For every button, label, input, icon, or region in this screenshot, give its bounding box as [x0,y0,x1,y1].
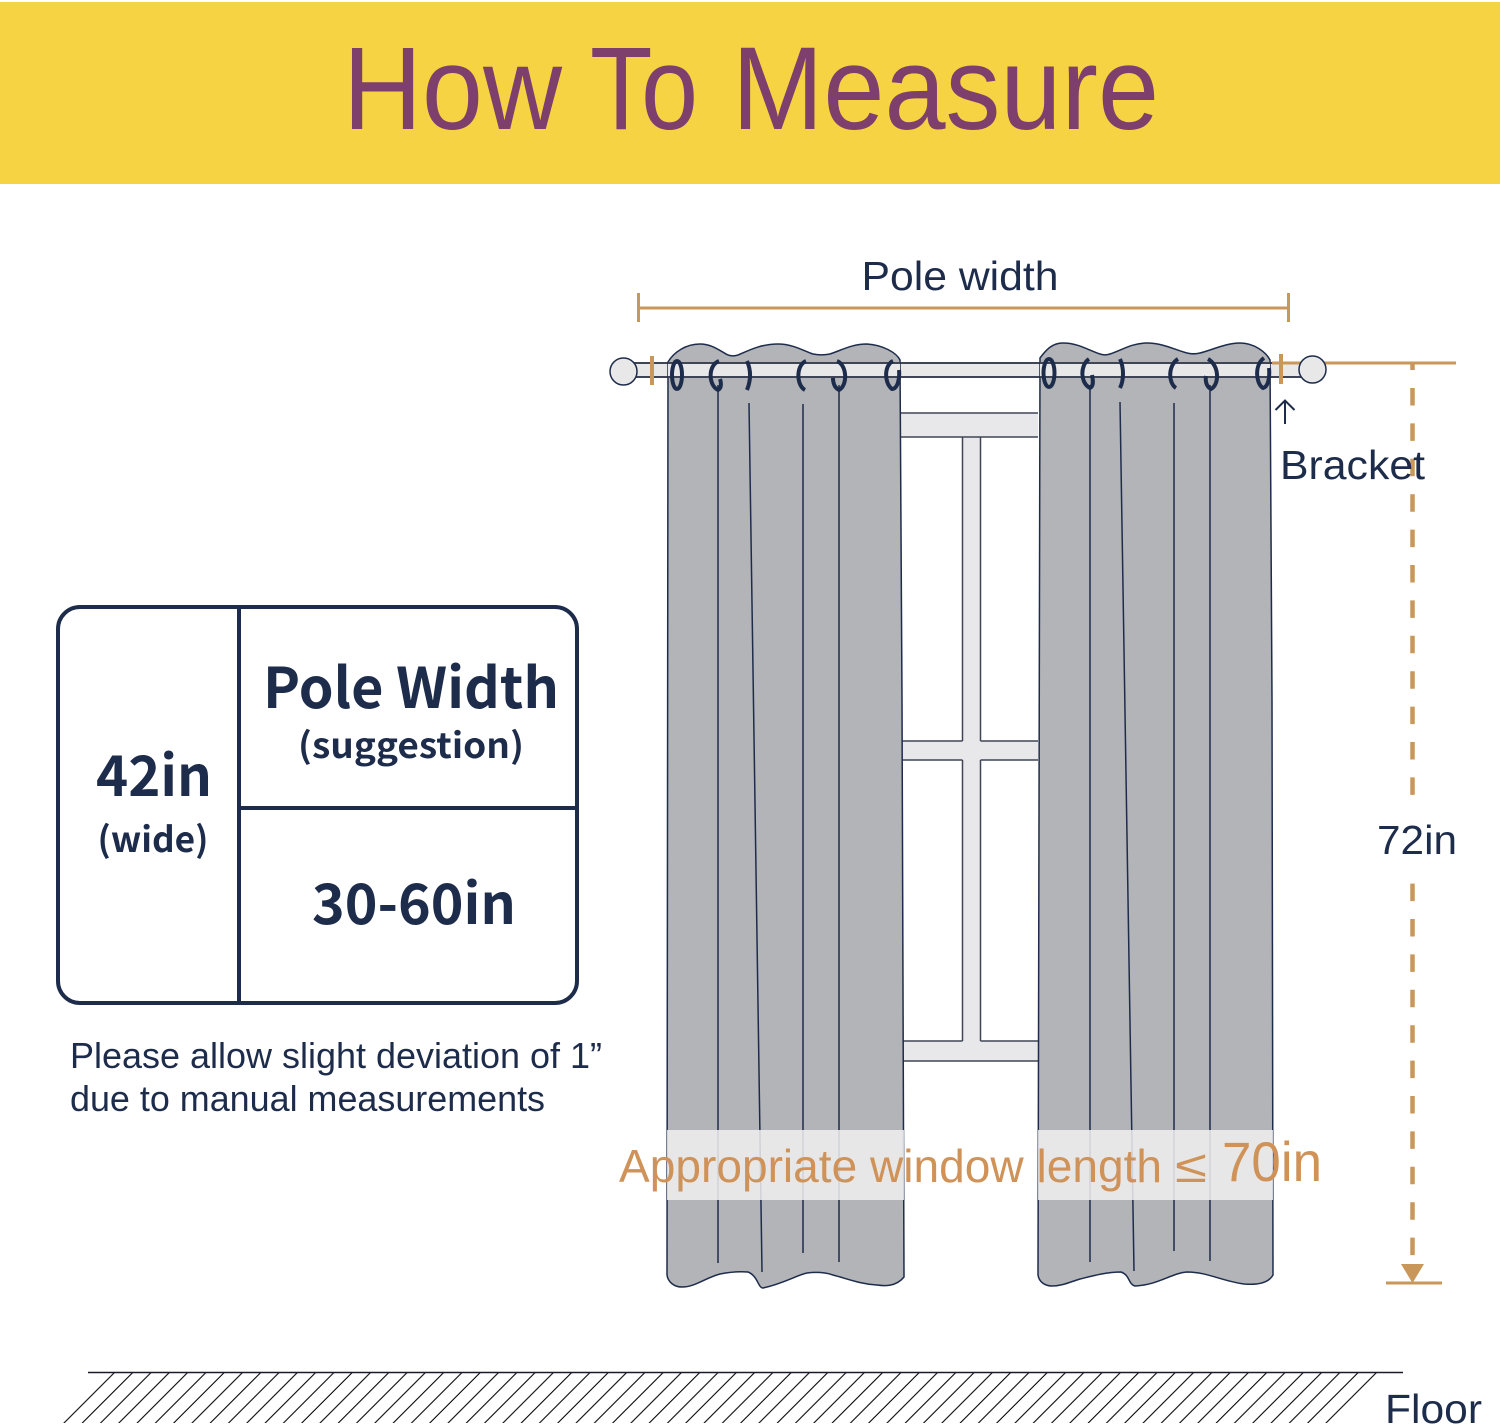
title: How [343,23,563,155]
left curtain [667,344,904,1288]
deviation note: due to manual measurements [70,1078,545,1119]
72in height dimension: 72in [1377,817,1457,863]
window length label: Appropriate window length [619,1140,1162,1192]
bracket label: Bracket [1280,442,1426,488]
size table [58,607,577,1003]
pole width heading cell [263,644,559,769]
title banner [0,2,1500,184]
pole width dimension [638,253,1288,322]
deviation note: Please allow slight deviation of 1” [70,1035,602,1076]
title [343,23,1159,155]
title: Measure [732,23,1159,155]
curtain width cell: 42in [96,732,212,813]
pole width dimension: Pole width [862,253,1058,299]
window length label: ≤ [1175,1140,1207,1192]
curtain width cell [96,732,212,863]
left curtain pleats [718,385,839,1272]
pole width heading cell: Pole Width [263,644,559,725]
right curtain grommets [1044,358,1269,389]
window length label [619,1130,1322,1193]
deviation note [70,1035,602,1119]
pole width range cell: 30-60in [312,860,516,941]
floor [62,1372,1482,1426]
translucent label band [667,1130,1273,1200]
right curtain pleats [1090,385,1210,1271]
window frame [900,413,1038,1061]
pole width heading cell: (suggestion) [298,718,524,769]
window length label: 70in [1222,1130,1322,1193]
title: To [590,23,698,155]
curtain width cell: (wide) [98,812,208,863]
left curtain grommets [672,361,899,390]
72in height dimension [1377,363,1457,1283]
right curtain [1038,343,1273,1286]
curtain pole [610,354,1456,385]
bracket arrow [1276,400,1294,424]
